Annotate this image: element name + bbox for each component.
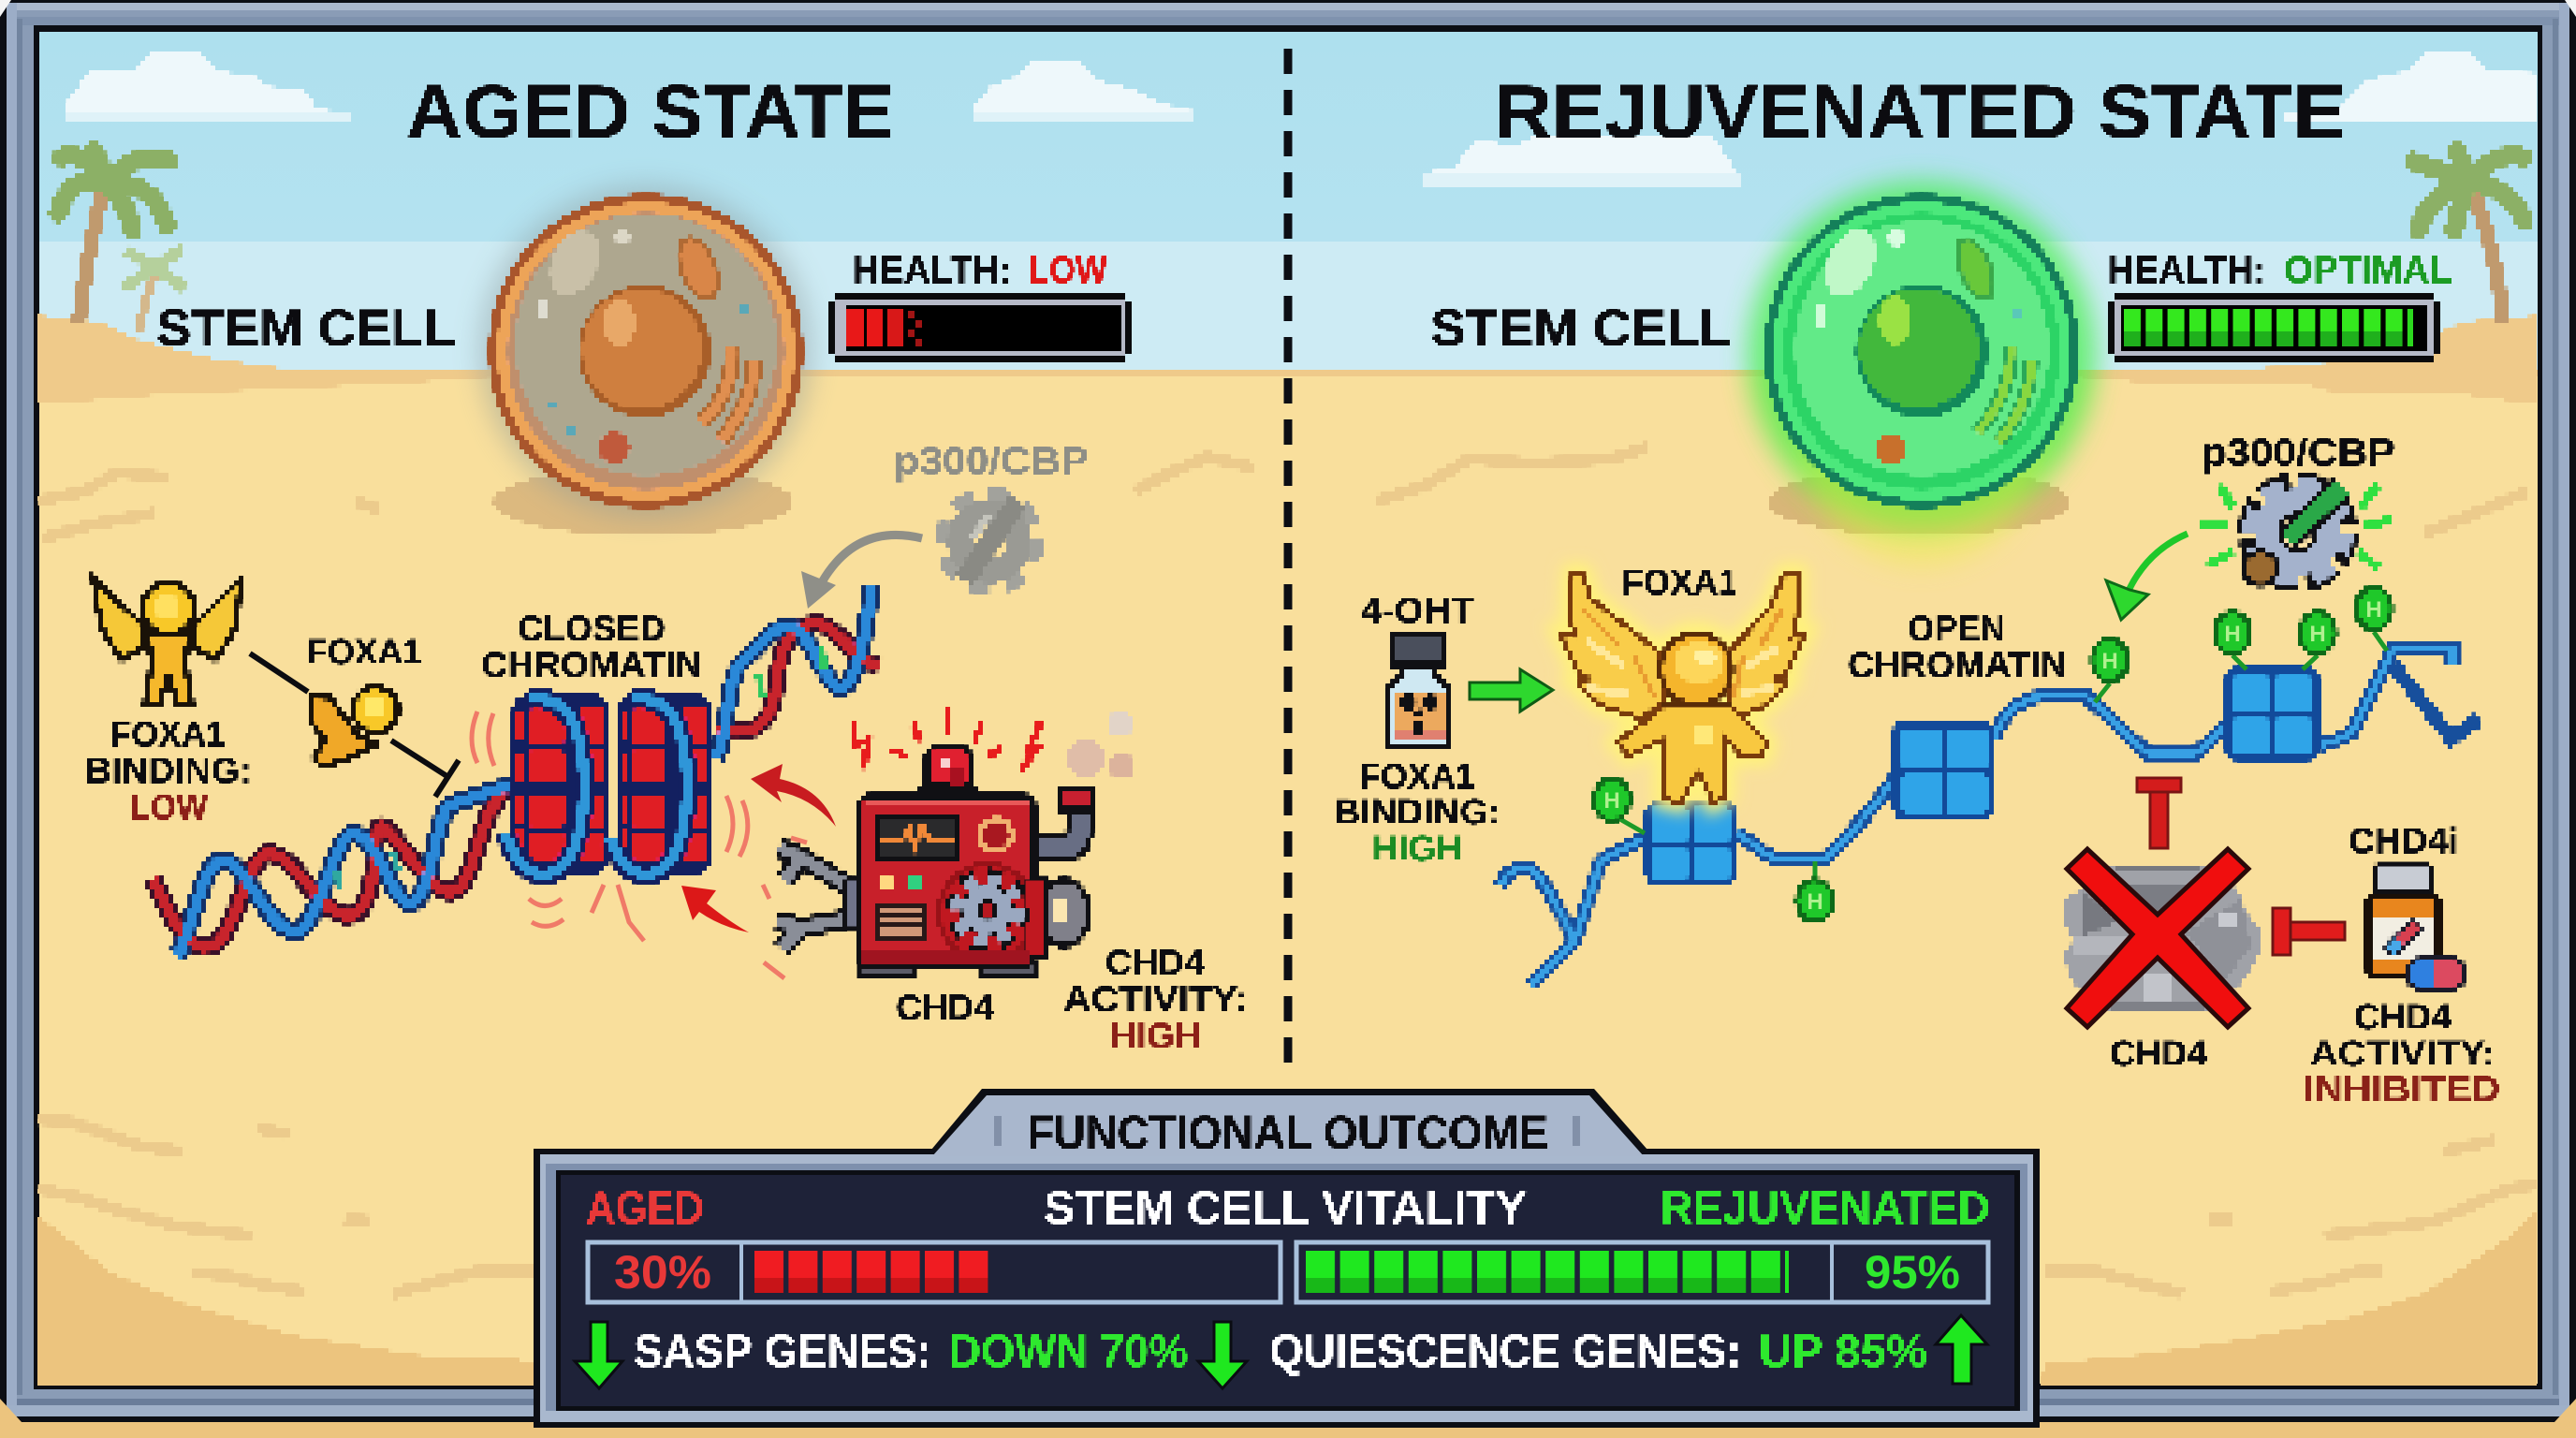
- FOXA1 golden angel: [1561, 574, 1804, 802]
- panel heading: FUNCTIONAL OUTCOME: [1027, 1107, 1548, 1159]
- FOXA1 binding high text: HIGH: [1372, 829, 1462, 869]
- vitality bar rejuvenated: [1296, 1242, 1988, 1302]
- aged stem cell: [479, 184, 812, 536]
- health value low: LOW: [1029, 248, 1107, 291]
- FOXA1 binding high text: BINDING:: [1334, 793, 1500, 832]
- open chromatin label: [1848, 609, 2067, 685]
- p300/CBP gear with brush: [2202, 485, 2392, 585]
- CHD4 activity high text: [1063, 944, 1248, 1056]
- down arrow middle: [1198, 1322, 1247, 1388]
- acetyl histone marks: H: [2365, 597, 2382, 623]
- health value optimal: OPTIMAL: [2284, 248, 2452, 291]
- DNA helix aged: [154, 586, 879, 956]
- CHD4 activity inhibited text: CHD4: [2354, 998, 2452, 1037]
- 4-OHT vial: [1388, 635, 1450, 748]
- red inhibition bar side: [2273, 908, 2345, 955]
- CHD4 label rejuvenated: CHD4: [2110, 1034, 2207, 1074]
- closed chromatin label: [481, 609, 702, 685]
- acetyl histone marks: [1594, 588, 2392, 921]
- FOXA1 angel small: [94, 580, 241, 704]
- inhibited CHD4 machine: [2066, 849, 2259, 1027]
- alarm sparks: [854, 709, 1041, 770]
- FOXA1 fragment small: [311, 687, 398, 767]
- CHD4 activity inhibited text: [2304, 998, 2500, 1109]
- title: aged state: AGED STATE: [406, 70, 894, 154]
- closed chromatin label: CLOSED: [518, 609, 666, 649]
- open chromatin label: OPEN: [1908, 609, 2005, 649]
- FOXA1 label: FOXA1: [306, 633, 422, 672]
- stem cell label rejuvenated: STEM CELL: [1430, 299, 1732, 357]
- health bar aged: [828, 293, 1132, 362]
- title: rejuvenated state: REJUVENATED STATE: [1495, 70, 2346, 154]
- red arrows from CHD4: [681, 764, 836, 932]
- health label rejuvenated: HEALTH:: [2108, 248, 2265, 291]
- FOXA1 label rejuvenated: FOXA1: [1622, 564, 1737, 603]
- p300/CBP label rejuvenated: p300/CBP: [2202, 431, 2395, 474]
- CHD4 activity inhibited text: INHIBITED: [2304, 1070, 2500, 1109]
- acetyl histone marks: H: [2224, 622, 2241, 647]
- palm trees left: [58, 150, 184, 333]
- vitality bar rejuvenated: 95%: [1865, 1246, 1960, 1299]
- FOXA1 binding high text: [1334, 757, 1500, 869]
- quiescence genes text: QUIESCENCE GENES:: [1269, 1327, 1741, 1377]
- red inhibition bar top: [2137, 778, 2181, 848]
- health label aged: HEALTH:: [853, 248, 1012, 291]
- divider: dashed line: [1284, 49, 1292, 1067]
- acetyl histone marks: H: [1807, 889, 1823, 915]
- sand dunes and ripple marks: [39, 315, 2538, 1384]
- CHD4i label: CHD4i: [2349, 822, 2458, 861]
- acetyl histone marks: H: [2101, 649, 2118, 674]
- up arrow quiescence: [1936, 1315, 1987, 1384]
- open nucleosomes: [1645, 667, 2320, 886]
- FOXA1 binding high text: FOXA1: [1359, 757, 1475, 797]
- closed nucleosomes: [505, 694, 712, 874]
- CHD4 activity high text: ACTIVITY:: [1063, 980, 1248, 1020]
- p300/CBP label aged: p300/CBP: [894, 439, 1089, 482]
- open chromatin label: CHROMATIN: [1848, 646, 2067, 685]
- green arrow to histone: [2106, 534, 2188, 620]
- grey arrow to DNA: [801, 535, 922, 609]
- CHD4 activity high text: HIGH: [1110, 1017, 1201, 1056]
- sasp genes text: DOWN 70%: [949, 1327, 1188, 1377]
- FOXA1 binding low text: LOW: [130, 788, 208, 828]
- rejuvenated stem cell: [1748, 182, 2096, 566]
- closed chromatin label: CHROMATIN: [481, 646, 702, 685]
- FOXA1 binding low text: BINDING:: [85, 752, 252, 791]
- p300/CBP gear aged: [946, 498, 1032, 584]
- smoke puffs: [1067, 711, 1134, 779]
- vitality bar aged: 30%: [614, 1246, 711, 1299]
- green arrow to FOXA1: [1470, 669, 1553, 712]
- CHD4 machine: [777, 747, 1094, 977]
- rejuvenated label: REJUVENATED: [1661, 1183, 1990, 1234]
- quiescence genes text: UP 85%: [1759, 1327, 1927, 1377]
- CHD4 label aged: CHD4: [896, 989, 994, 1028]
- vitality bar aged: [588, 1242, 1281, 1302]
- panel: functional outcome: [534, 1089, 2040, 1428]
- acetyl histone marks: H: [1603, 788, 1620, 814]
- palm tree right: [2413, 152, 2525, 322]
- aged label: AGED: [586, 1183, 704, 1234]
- clouds: [66, 53, 2537, 188]
- inhibition lines FOXA1: [250, 653, 459, 797]
- CHD4 activity high text: CHD4: [1105, 944, 1205, 983]
- CHD4i pill bottle: [2368, 866, 2466, 990]
- 4-OHT label: 4-OHT: [1361, 592, 1473, 631]
- health bar rejuvenated: [2108, 293, 2440, 362]
- CHD4 activity inhibited text: ACTIVITY:: [2310, 1034, 2496, 1074]
- sasp genes text: SASP GENES:: [634, 1327, 931, 1377]
- stem cell label aged: STEM CELL: [156, 299, 456, 357]
- acetyl histone marks: H: [2309, 622, 2326, 647]
- vibration marks: [472, 712, 807, 978]
- down arrow sasp: [575, 1322, 622, 1388]
- FOXA1 binding low text: FOXA1: [110, 715, 226, 755]
- vitality heading: STEM CELL VITALITY: [1044, 1183, 1527, 1234]
- FOXA1 binding low text: [85, 715, 252, 828]
- open chromatin strand: [1500, 647, 2479, 985]
